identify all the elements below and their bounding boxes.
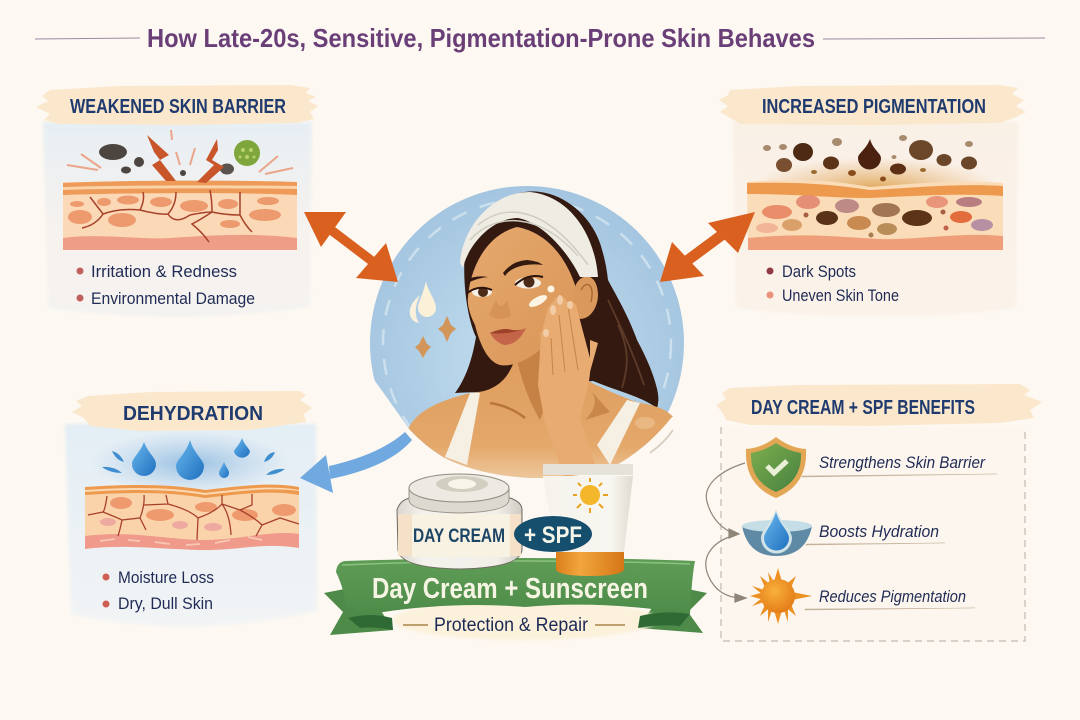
heading: INCREASED PIGMENTATION: [762, 96, 986, 118]
banner: [716, 384, 1042, 426]
eyebrows: [503, 260, 543, 276]
debris icons: [67, 130, 293, 183]
portrait circle: [370, 186, 684, 500]
bullet list: Uneven Skin Tone: [782, 286, 899, 305]
heading: DEHYDRATION: [123, 403, 263, 425]
icon: sparkles: [415, 316, 456, 358]
dashed inner ring: [382, 202, 672, 428]
eyes: [515, 278, 541, 288]
water drops: [90, 428, 290, 492]
benefit text 3: Reduces Pigmentation: [819, 587, 966, 606]
panel: weakened skin barrier: [36, 85, 318, 317]
panel background: [733, 122, 1018, 317]
bullet list: [766, 262, 899, 305]
panel background: [65, 424, 317, 626]
ribbon folds: [348, 612, 690, 630]
bullet list: [102, 568, 214, 613]
benefit text 2: Boosts Hydration: [819, 522, 939, 541]
nose: [489, 300, 511, 319]
icon: cream drop: [410, 281, 436, 323]
panel background: [43, 122, 312, 317]
lips: [490, 328, 526, 345]
ribbon title: Day Cream + Sunscreen: [372, 573, 648, 605]
arrow: orange double right: [660, 212, 755, 282]
icon: sun: [750, 568, 812, 624]
woman portrait: [405, 191, 674, 480]
hair: [455, 191, 658, 408]
skin cross-section illustration: [747, 180, 1003, 250]
badge: +SPF: + SPF: [524, 522, 582, 549]
benefit text 1: Strengthens Skin Barrier: [819, 453, 986, 472]
heading: WEAKENED SKIN BARRIER: [70, 96, 286, 118]
rim accent: [650, 430, 673, 453]
panel background: [722, 427, 1025, 641]
heading: DAY CREAM + SPF BENEFITS: [751, 397, 975, 419]
shoulders and chest: [405, 345, 674, 480]
ribbon main band: [336, 558, 695, 618]
ear: [574, 276, 598, 319]
face: [468, 227, 575, 365]
icon: shield: [746, 437, 806, 498]
banner: [36, 85, 318, 125]
connector arrows: [706, 463, 746, 602]
product ribbon: [324, 558, 707, 640]
bullet list: Dark Spots: [782, 262, 856, 281]
product: day cream jar: [397, 474, 522, 569]
product: sunscreen tube: [543, 464, 633, 576]
bullet list: Dry, Dull Skin: [118, 594, 213, 613]
jar label: [398, 514, 521, 556]
ribbon subtitle: Protection & Repair: [434, 615, 589, 636]
pigment glow and spots: [750, 135, 1000, 202]
tank straps: [445, 393, 480, 465]
jar lid: [409, 488, 509, 513]
title: How Late-20s, Sensitive, Pigmentation-Prone Skin Behaves: [147, 23, 815, 53]
badge: +SPF: [514, 516, 592, 552]
banner: [72, 391, 312, 431]
bullet list: Environmental Damage: [91, 289, 255, 308]
hand: [538, 295, 600, 480]
banner: [719, 85, 1026, 125]
bullet list: Irritation & Redness: [91, 262, 237, 281]
bullet list: Moisture Loss: [118, 568, 214, 587]
arrow: orange double left: [304, 212, 398, 282]
circle background: [370, 186, 684, 500]
panel: dehydration: [65, 391, 317, 626]
bullet list: [76, 262, 255, 308]
dashed border: [721, 427, 1025, 641]
skin cross-section illustration: [85, 485, 299, 550]
arrow: blue curved: [300, 432, 412, 493]
cream band: [393, 600, 657, 640]
skin cross-section illustration: [63, 181, 297, 250]
icon: sun: [573, 478, 608, 513]
product: day cream jar: DAY CREAM: [413, 526, 505, 547]
icon: water drop bowl: [742, 509, 812, 556]
panel: increased pigmentation: [719, 85, 1026, 317]
headband: [460, 192, 598, 277]
ribbon tails: [324, 585, 393, 635]
cream marks: [529, 295, 547, 307]
panel: benefits: [706, 384, 1042, 641]
